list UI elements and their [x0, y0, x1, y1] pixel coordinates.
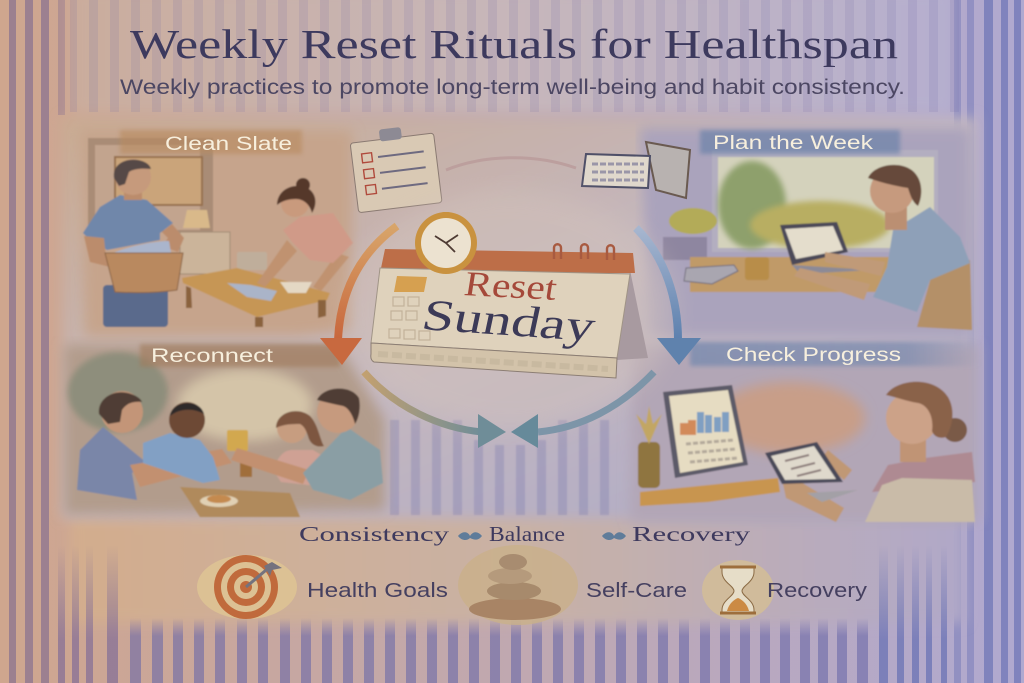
- label: recovery: Recovery: [767, 580, 867, 602]
- desk calendar: reset sunday: [371, 212, 648, 378]
- heading: plan the week: Plan the Week: [713, 133, 874, 154]
- title: Weekly Reset Rituals for Healthspan: [130, 21, 898, 67]
- faint stripes in title area: [70, 0, 960, 112]
- pillars line: [299, 522, 751, 546]
- banner: clean slate: [120, 130, 302, 154]
- rings: [554, 244, 614, 260]
- label: health goals: Health Goals: [307, 580, 448, 602]
- icon: leaf divider: [602, 532, 626, 540]
- plant and drawer box: [663, 208, 717, 260]
- label: self-care: Self-Care: [586, 580, 687, 602]
- person 2: [143, 402, 220, 483]
- person 1: [77, 391, 232, 500]
- clock: [415, 212, 477, 274]
- calendar title: Reset: [462, 264, 560, 308]
- arc between top items: [446, 158, 576, 170]
- plant in vase: [636, 406, 662, 488]
- calendar page: [371, 268, 630, 358]
- date grid: [378, 297, 608, 369]
- man with laundry basket: [83, 159, 184, 327]
- panel: reconnect scene: [64, 345, 385, 517]
- desk: [640, 478, 780, 506]
- lower stripes fading into panel: [58, 545, 947, 683]
- monitor with bar chart: [663, 385, 748, 478]
- calendar base: [371, 343, 617, 378]
- arrow: top left, orange: [320, 226, 397, 365]
- icon: stacked stones: [458, 545, 578, 625]
- banner: reconnect: [140, 344, 340, 367]
- calendar title: [418, 264, 600, 351]
- window with trees: [712, 150, 938, 252]
- lamp and drawer: [180, 210, 230, 274]
- man with laptop: [780, 165, 970, 312]
- warm backdrop: [715, 382, 865, 454]
- glasses raised in a toast: [227, 430, 252, 477]
- desk: [690, 257, 895, 292]
- banner: check progress: [690, 342, 980, 366]
- arrow: top right, blue: [636, 228, 701, 365]
- person 4: [231, 388, 383, 500]
- heading: reconnect: Reconnect: [151, 346, 274, 367]
- heading: check progress: Check Progress: [726, 345, 901, 366]
- calendar title: Sunday: [418, 291, 600, 351]
- heading: clean slate: Clean Slate: [165, 134, 292, 155]
- stripes between lower scenes: [390, 420, 609, 515]
- tree: [68, 352, 168, 432]
- table: [182, 268, 330, 317]
- chair: [917, 260, 972, 330]
- pillars line: Consistency: [299, 522, 450, 546]
- kettle: [237, 252, 267, 270]
- person 3: [273, 411, 324, 486]
- banner: plan the week: [700, 130, 900, 154]
- central glow: [345, 190, 675, 430]
- pillars line: Recovery: [632, 522, 751, 546]
- plate with bun: [200, 495, 238, 507]
- woman with tablet: [765, 382, 975, 522]
- envelope note: [394, 276, 427, 292]
- panel: clean slate scene: [80, 130, 353, 336]
- calendar header: [380, 249, 635, 273]
- woman wiping table: [227, 178, 353, 301]
- arrow: bottom left, teal: [364, 372, 506, 448]
- mug: [745, 257, 769, 280]
- clipboard checklist: [349, 123, 442, 213]
- pillars line: Balance: [489, 522, 565, 546]
- sky glow: [177, 369, 313, 441]
- panel: check progress scene: [630, 345, 978, 522]
- icon: hourglass: [702, 560, 774, 620]
- table: [180, 487, 300, 517]
- calendar rear stand: [617, 270, 648, 360]
- icon: leaf divider: [458, 532, 482, 540]
- panel: plan the week scene: [640, 128, 972, 335]
- notebook: [684, 265, 738, 284]
- arrow: bottom right, teal: [511, 372, 654, 448]
- icon: target with arrow: [197, 555, 297, 619]
- window: [88, 138, 213, 232]
- tablet and calendar cards: [582, 142, 690, 198]
- subtitle: Weekly practices to promote long-term well-being and habit consistency.: [120, 76, 905, 99]
